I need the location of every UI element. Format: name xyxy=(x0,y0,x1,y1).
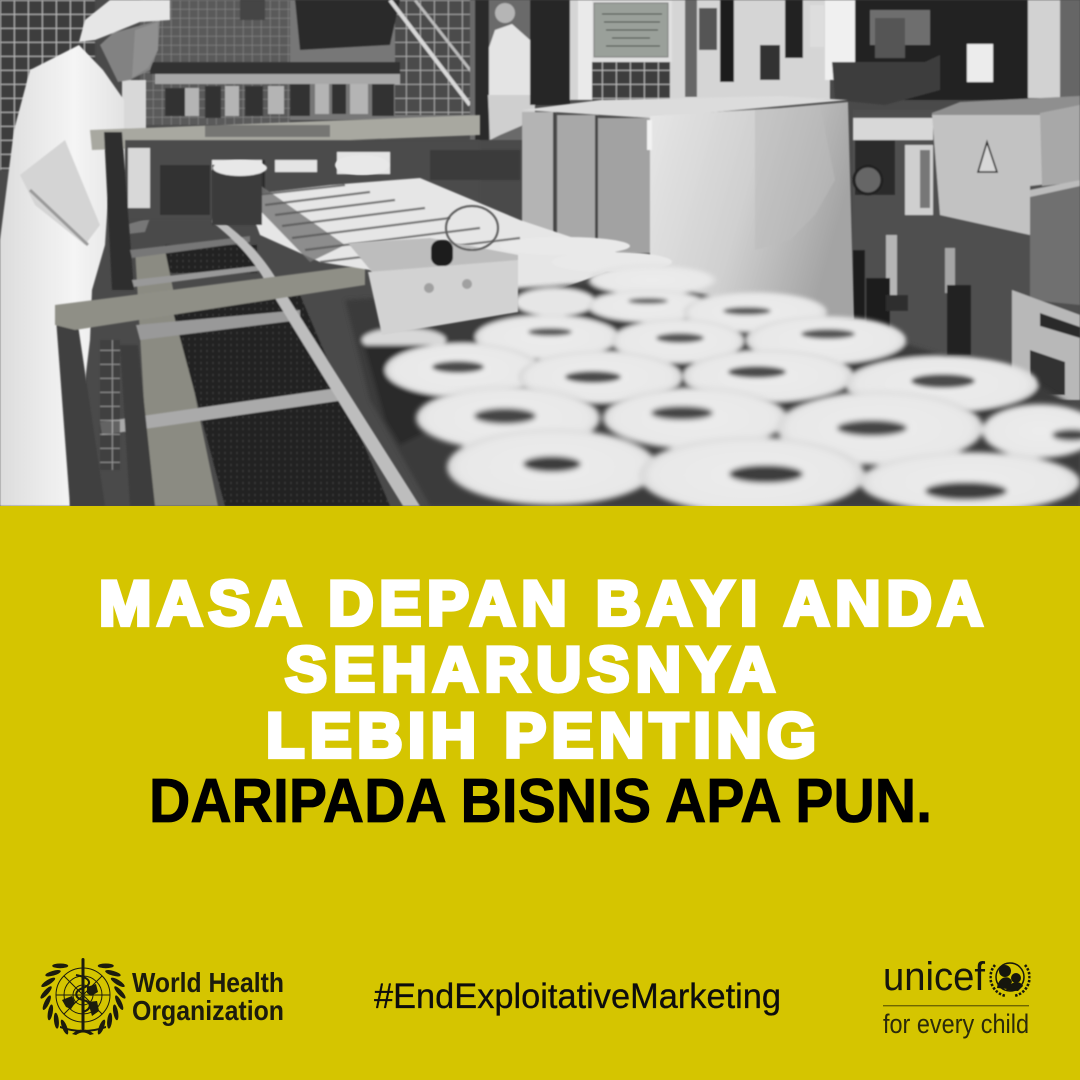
hashtag: #EndExploitativeMarketing xyxy=(374,977,781,1016)
floor xyxy=(853,110,1080,400)
conveyor structure xyxy=(55,115,520,506)
pallet xyxy=(1012,290,1080,400)
headline xyxy=(99,569,983,836)
cardboard stack xyxy=(1030,180,1080,305)
logo: World Health Organization xyxy=(39,958,284,1035)
photo bottom edge xyxy=(0,506,1080,526)
logo: unicef xyxy=(883,955,1030,1039)
right machine xyxy=(855,0,1080,100)
unicef wordmark: unicef xyxy=(883,955,986,999)
box on conveyor xyxy=(348,206,518,335)
headline white line 2: SEHARUSNYA xyxy=(285,635,775,705)
headline white line 3: LEBIH PENTING xyxy=(266,701,816,771)
headline black line: DARIPADA BISNIS APA PUN. xyxy=(149,767,932,836)
person xyxy=(0,0,170,506)
icon: WHO emblem xyxy=(39,958,127,1035)
yellow background panel xyxy=(0,506,1080,1080)
posts xyxy=(886,235,897,297)
wreath leaves xyxy=(39,963,127,1035)
background worker xyxy=(470,0,530,140)
cans on the belt xyxy=(345,265,1080,506)
divider xyxy=(883,1005,1029,1006)
icon: unicef emblem xyxy=(990,963,1030,996)
WHO wordmark xyxy=(132,967,284,1026)
white boxes xyxy=(522,96,854,320)
back wall and sign xyxy=(570,0,830,100)
WHO wordmark: World Health xyxy=(132,967,284,998)
WHO wordmark: Organization xyxy=(132,995,284,1026)
tagline: for every child xyxy=(883,1009,1029,1039)
photo: factory production line with cans xyxy=(0,0,1080,513)
foreground cans xyxy=(416,386,1080,513)
electrical cabinet xyxy=(932,100,1080,235)
far stack of cans xyxy=(212,155,672,300)
headline white line 1: MASA DEPAN BAYI ANDA xyxy=(99,569,983,639)
